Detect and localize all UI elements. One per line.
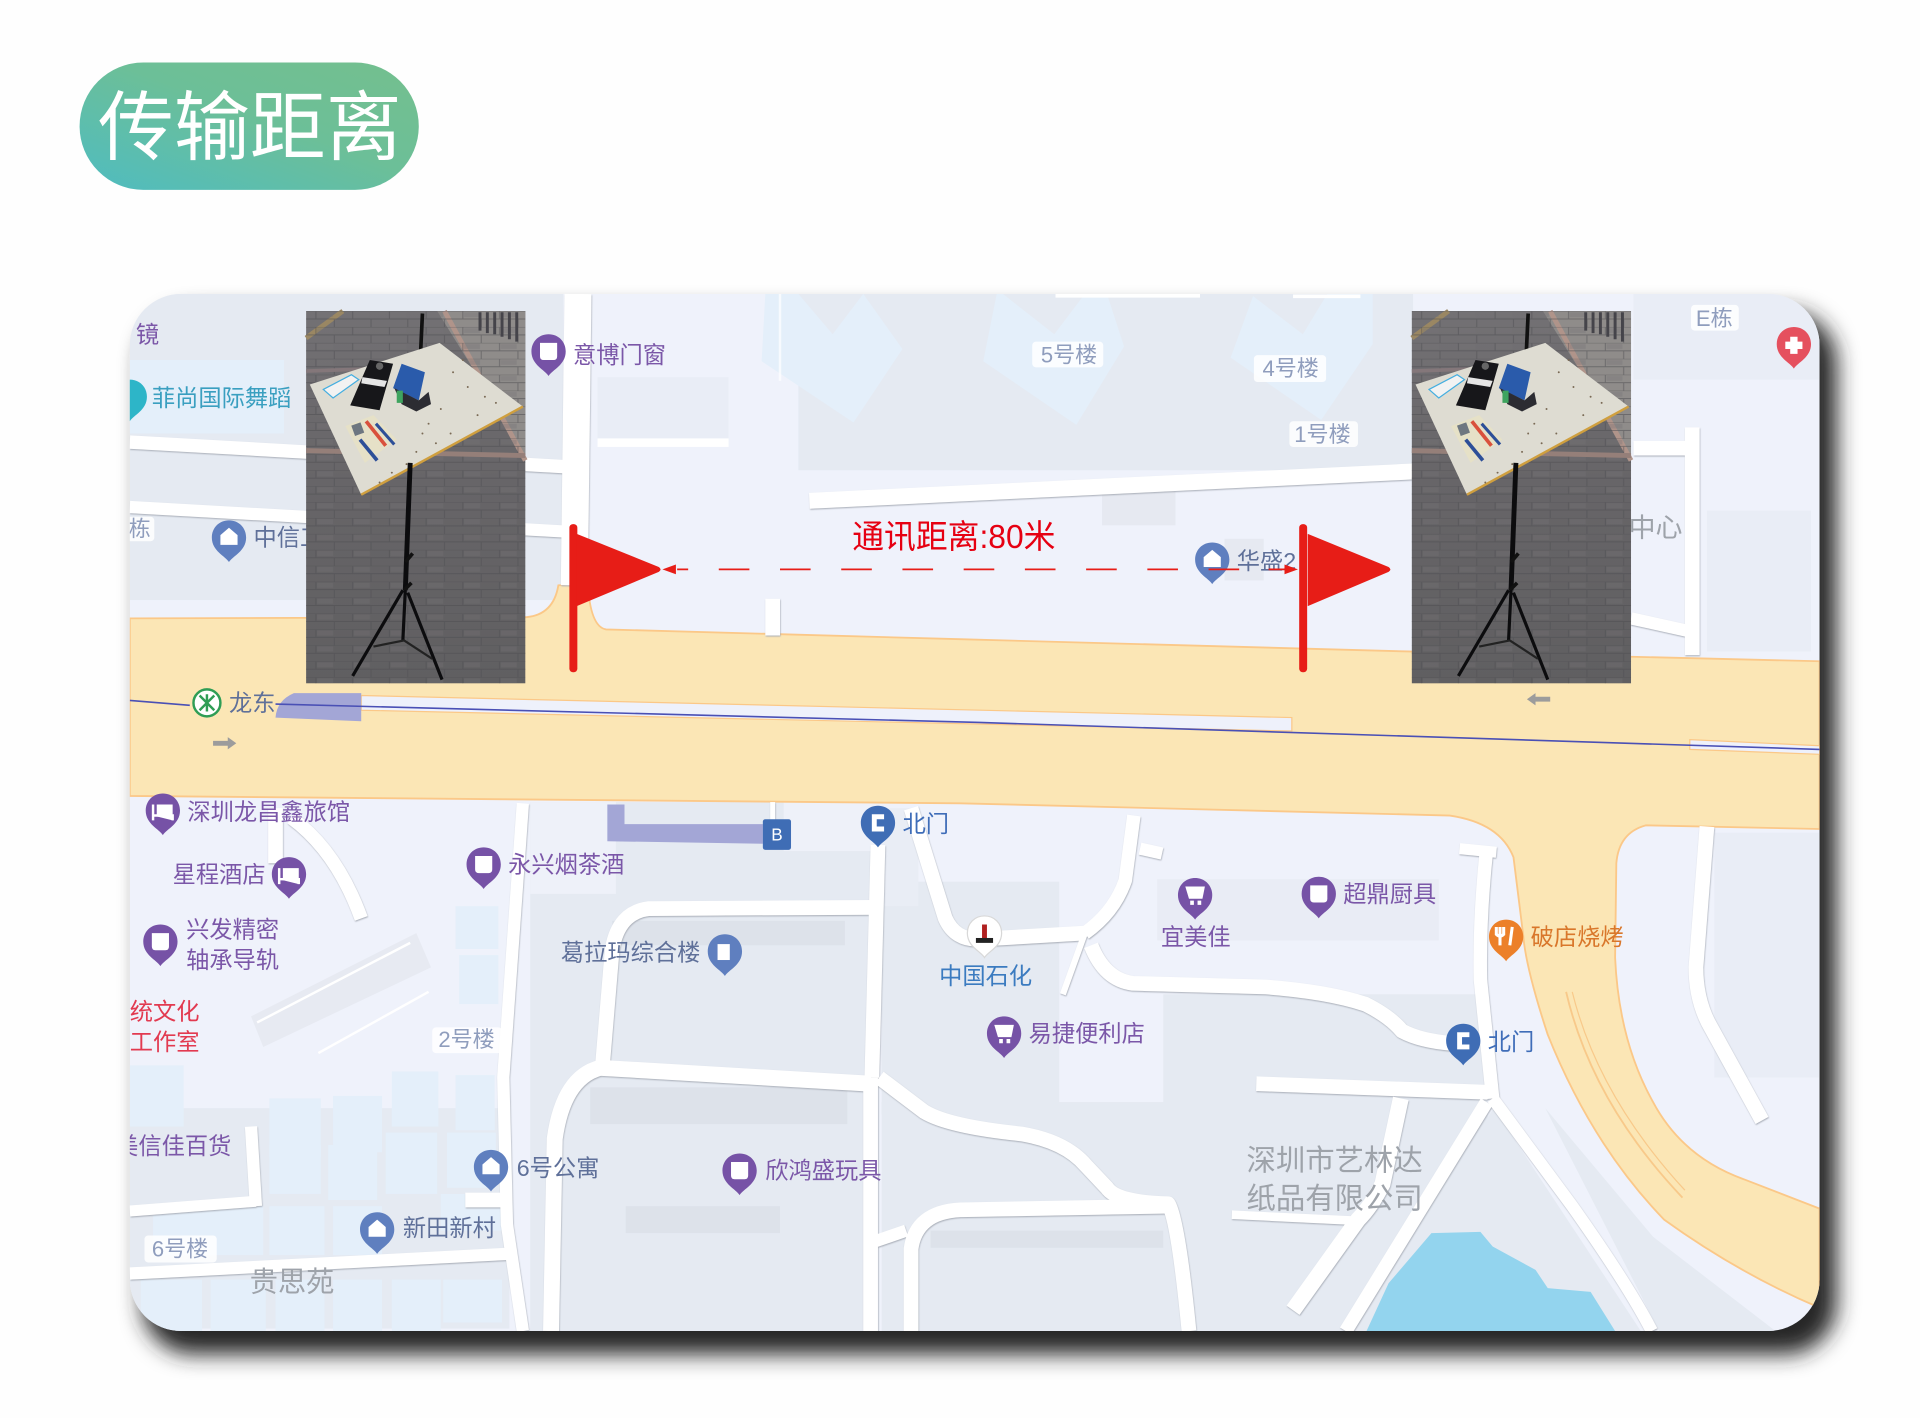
poi: 统文化工作室: 工作室 [130, 1029, 200, 1055]
poi: 超鼎厨具: 超鼎厨具 [1343, 881, 1436, 907]
area names: 纸品有限公司 [1247, 1182, 1423, 1215]
poi: 6号公寓 [474, 1150, 599, 1191]
area names: 中心 [1629, 513, 1682, 543]
poi: 新田新村 [360, 1212, 496, 1254]
poi: 易捷便利店 [987, 1016, 1145, 1058]
poi: 易捷便利店: 易捷便利店 [1029, 1020, 1145, 1046]
building labels: 1号楼 [1294, 422, 1351, 447]
road direction arrows [213, 693, 1550, 749]
poi: 宜美佳: 宜美佳 [1161, 924, 1231, 950]
building labels: 2号楼 [438, 1027, 495, 1052]
poi: 北门 east: 北门 [1488, 1029, 1534, 1055]
poi: 北门 west: 北门 [902, 811, 949, 837]
main road [130, 583, 1820, 1308]
area names: 深圳市艺林达 [1247, 1144, 1423, 1177]
photo: right device on tripod [1412, 311, 1631, 683]
poi: 北门 west [861, 806, 949, 847]
poi: 葛拉玛综合楼: 葛拉玛综合楼 [561, 940, 700, 966]
poi: 信佳百货: 美信佳百货 [115, 1133, 231, 1159]
poi: 欣鸿盛玩具: 欣鸿盛玩具 [765, 1158, 882, 1184]
title badge: 传输距离 [98, 86, 402, 171]
poi: 北门 east [1446, 1024, 1534, 1065]
poi: 中信 [212, 520, 306, 562]
poi: 镜: 镜 [136, 321, 159, 347]
poi: 龙东 metro: 龙东 [229, 690, 275, 716]
building labels: 5号楼 [1041, 343, 1097, 368]
entrance sign B: B [771, 825, 783, 845]
building labels: 4号楼 [1262, 356, 1319, 381]
poi: 欣鸿盛玩具 [722, 1153, 882, 1195]
distance dashed arrow [662, 565, 1298, 574]
poi: 葛拉玛综合楼 [561, 934, 742, 976]
poi: 星程酒店: 星程酒店 [173, 861, 266, 887]
distance label: 通讯距离:80米 [852, 519, 1056, 556]
poi: 深圳龙昌鑫旅馆 [146, 793, 350, 835]
poi: 宜美佳 [1161, 878, 1231, 950]
poi: hospital pin [1777, 327, 1811, 369]
poi: 兴发精密轴承导轨 [143, 916, 279, 973]
photo: left device on tripod [306, 311, 525, 683]
poi: 中国石化: 中国石化 [939, 963, 1032, 989]
building labels: 栋 [129, 517, 151, 542]
poi: 菲尚国际舞蹈 [113, 380, 291, 421]
poi: 深圳龙昌鑫旅馆: 深圳龙昌鑫旅馆 [187, 799, 350, 825]
area names: 贵思苑 [250, 1267, 334, 1298]
road median and metro line [130, 693, 1820, 1198]
poi: 星程酒店 [173, 857, 306, 899]
building labels: 6号楼 [152, 1237, 208, 1262]
poi: 中国石化 [939, 916, 1032, 989]
poi: 华盛: 华盛2 [1237, 548, 1296, 574]
poi: 永兴烟茶酒: 永兴烟茶酒 [508, 852, 624, 878]
poi: 兴发精密轴承导轨: 轴承导轨 [186, 947, 279, 973]
minor roads [130, 294, 1762, 1331]
flag: right [1299, 524, 1390, 672]
poi: 破店烧烤: 破店烧烤 [1531, 924, 1624, 950]
flag: left [569, 524, 661, 672]
title badge [80, 62, 419, 190]
poi: 华盛 [1195, 542, 1296, 584]
poi: 意博门窗: 意博门窗 [573, 342, 666, 368]
map blocks and buildings [130, 294, 1820, 1331]
poi: 新田新村: 新田新村 [403, 1215, 496, 1241]
purple station block B [607, 805, 763, 844]
poi: 中信: 中信工 [253, 525, 323, 551]
poi: 超鼎厨具 [1302, 877, 1436, 918]
poi: 破店烧烤 [1489, 920, 1624, 961]
poi: 永兴烟茶酒 [467, 847, 624, 889]
poi: 统文化工作室 [130, 998, 200, 1055]
area names [250, 513, 1682, 1298]
poi: 意博门窗 [531, 334, 666, 376]
poi: 龙东 metro [193, 689, 275, 716]
entrance sign B [763, 819, 791, 850]
card shadow [142, 311, 1837, 1354]
poi: 6号公寓: 6号公寓 [517, 1155, 599, 1181]
map panel [113, 294, 1820, 1331]
building labels: E栋 [1696, 306, 1733, 331]
poi: 兴发精密轴承导轨: 兴发精密 [186, 916, 279, 942]
poi: 菲尚国际舞蹈: 菲尚国际舞蹈 [152, 385, 291, 411]
water [1367, 1232, 1615, 1331]
building labels [122, 305, 1739, 1262]
poi: 统文化工作室: 统文化 [130, 998, 200, 1024]
